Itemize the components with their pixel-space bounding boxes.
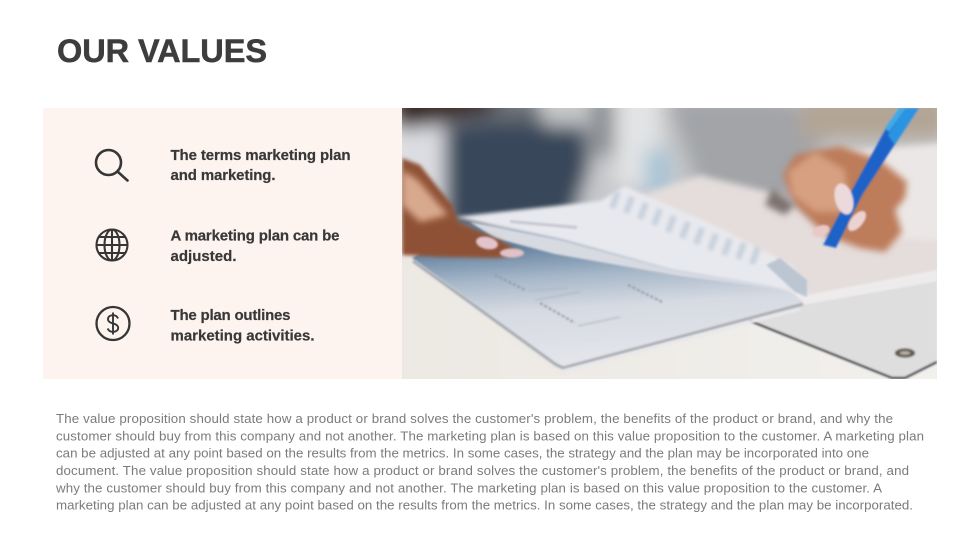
folder bbox=[750, 281, 937, 378]
table bbox=[395, 262, 945, 385]
value text: activities bbox=[170, 307, 314, 344]
icon: magnifying glass bbox=[96, 150, 128, 180]
value text: activities: The plan outlines bbox=[170, 307, 290, 324]
value text: adjusted bbox=[170, 228, 340, 265]
value text: adjusted: adjusted. bbox=[170, 248, 236, 265]
value text: adjusted: A marketing plan can be bbox=[170, 228, 340, 244]
fingernails bbox=[812, 182, 868, 237]
lower notebook page bbox=[412, 225, 803, 372]
blue pen bbox=[823, 108, 919, 248]
body paragraph: marketing plan can be adjusted at any point based on the results from the metrics. In some cases, the strategy and the plan may be incorporated. bbox=[56, 498, 913, 512]
icon: globe bbox=[96, 230, 128, 260]
photo: hands writing in notebook bbox=[402, 108, 937, 379]
body paragraph: document. The value proposition should state how a product or brand solves the customer's problem, the benefits of the product or brand, and bbox=[56, 463, 909, 478]
body paragraph: The value proposition should state how a product or brand solves the customer's problem, the benefits of the product or brand, and why the bbox=[56, 411, 893, 426]
panel: values list bbox=[43, 108, 402, 379]
upper notebook page being turned bbox=[456, 186, 794, 288]
body paragraph bbox=[55, 411, 924, 512]
value text: terms: and marketing. bbox=[170, 167, 276, 184]
left hand bbox=[402, 158, 524, 258]
title: OUR VALUES bbox=[57, 33, 267, 69]
body paragraph: why the customer should buy from this company and not another. The marketing plan is based on this value proposition to the customer. A bbox=[55, 480, 882, 496]
right hand bbox=[765, 146, 907, 252]
value text: activities: marketing activities. bbox=[170, 328, 314, 344]
icon: dollar coin bbox=[96, 307, 130, 340]
value text: terms bbox=[170, 147, 350, 184]
right page edge bbox=[806, 270, 937, 300]
notebook spiral binding bbox=[612, 192, 758, 264]
value text: terms: The terms marketing plan bbox=[170, 147, 350, 164]
body paragraph: customer should buy from this company and not another. The marketing plan is based on this value proposition to the customer. A marketing plan bbox=[56, 428, 924, 444]
body paragraph: can be adjusted at any point based on the results from the metrics. In some cases, the strategy and the plan may be incorporated into one bbox=[56, 446, 869, 460]
